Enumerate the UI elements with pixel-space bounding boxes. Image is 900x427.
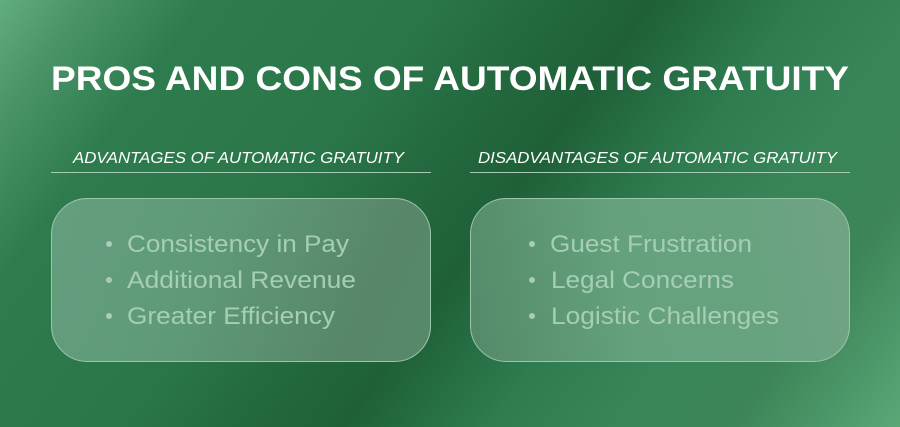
card: advantages list: [52, 198, 430, 362]
heading: advantages: ADVANTAGES OF AUTOMATIC GRATUITY: [72, 150, 405, 167]
list item: Logistic Challenges: Logistic Challenges: [551, 303, 779, 330]
list item: Greater Efficiency: Greater Efficiency: [127, 303, 335, 330]
heading: disadvantages: DISADVANTAGES OF AUTOMATIC GRATUITY: [478, 150, 838, 167]
card: disadvantages list: [470, 198, 850, 362]
panel: disadvantages: [470, 150, 850, 362]
list item: Legal Concerns: Legal Concerns: [551, 267, 734, 294]
panel: advantages: [51, 150, 431, 362]
list item: Consistency in Pay: Consistency in Pay: [127, 231, 349, 258]
list item: Guest Frustration: Guest Frustration: [550, 231, 752, 258]
list item: Additional Revenue: Additional Revenue: [127, 267, 356, 294]
title: PROS AND CONS OF AUTOMATIC GRATUITY: [51, 60, 849, 98]
